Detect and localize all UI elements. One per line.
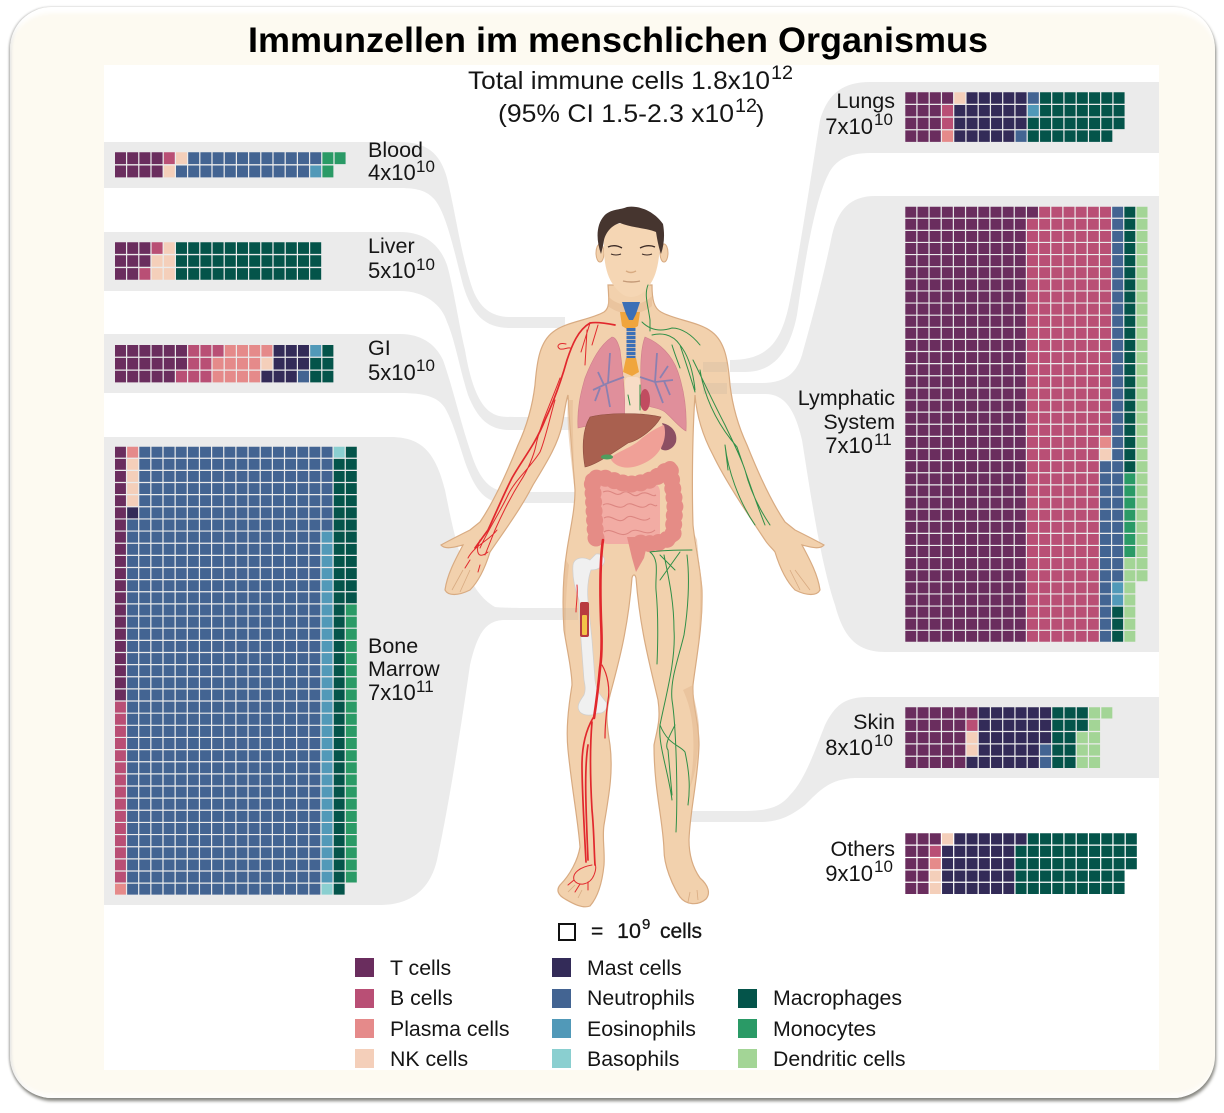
label: skin: 10 bbox=[874, 731, 893, 750]
label: bone marrow: 11 bbox=[416, 677, 434, 696]
label: GI bbox=[368, 336, 435, 385]
label: skin: Skin bbox=[853, 710, 895, 734]
thyroid and airway bbox=[620, 302, 640, 376]
waffle: skin bbox=[905, 713, 1114, 762]
legend column 3: Monocytes bbox=[773, 1017, 876, 1041]
label: lymphatic system bbox=[798, 386, 895, 458]
label: blood: 10 bbox=[416, 157, 435, 176]
legend column 1: B cells bbox=[390, 986, 453, 1010]
total immune cells heading: ) bbox=[756, 100, 764, 128]
legend bbox=[355, 956, 906, 1071]
title: Immunzellen im menschlichen Organismus bbox=[248, 21, 988, 60]
liver bbox=[583, 414, 661, 467]
label: liver bbox=[368, 234, 435, 283]
bronchi bbox=[593, 353, 673, 407]
face bbox=[604, 223, 660, 297]
spleen bbox=[661, 423, 676, 450]
large intestine bbox=[592, 468, 675, 544]
label: bone marrow: Bone bbox=[368, 634, 418, 658]
label: GI: GI bbox=[368, 336, 391, 360]
label: lymphatic system: 7x10 bbox=[825, 433, 873, 458]
label: blood bbox=[368, 138, 435, 185]
label: lungs: 10 bbox=[874, 110, 893, 129]
waffle: blood bbox=[115, 158, 347, 171]
body silhouette bbox=[441, 285, 824, 907]
arteries bbox=[465, 323, 615, 892]
total immune cells heading: 12 bbox=[771, 63, 793, 84]
label: lymphatic system: 11 bbox=[874, 430, 892, 449]
label: lymphatic system: Lymphatic bbox=[798, 386, 895, 410]
waffle: bone marrow bbox=[120, 447, 351, 896]
legend column 2 bbox=[552, 956, 696, 1071]
label: liver: 10 bbox=[416, 255, 435, 274]
connector ribbons bbox=[104, 82, 1159, 905]
gall bladder bbox=[601, 454, 613, 460]
legend column 1: T cells bbox=[390, 956, 451, 980]
waffle: lungs bbox=[905, 98, 1126, 136]
total immune cells heading: (95% CI 1.5-2.3 x10 bbox=[498, 100, 734, 128]
legend column 2: Eosinophils bbox=[587, 1017, 696, 1041]
label: others: 10 bbox=[874, 857, 893, 876]
esophagus and heart bbox=[625, 377, 640, 417]
label: others: Others bbox=[830, 837, 895, 861]
total immune cells heading: Total immune cells 1.8x10 bbox=[468, 67, 770, 95]
scale key: 9 bbox=[642, 916, 650, 933]
muscle shading bbox=[563, 296, 703, 790]
lungs bbox=[578, 337, 686, 431]
legend column 3 bbox=[738, 986, 906, 1071]
total immune cells heading: 12 bbox=[735, 96, 757, 117]
ears bbox=[596, 244, 668, 262]
scale key: = bbox=[591, 920, 603, 943]
waffle: liver bbox=[115, 248, 322, 274]
label: lungs: 7x10 bbox=[825, 114, 873, 139]
label: skin bbox=[825, 710, 895, 760]
legend column 2: Mast cells bbox=[587, 956, 682, 980]
white panel bbox=[104, 65, 1159, 1070]
total immune cells heading bbox=[468, 63, 793, 128]
label: skin: 8x10 bbox=[825, 735, 873, 760]
small intestine bbox=[598, 482, 660, 544]
legend column 3: Macrophages bbox=[773, 986, 902, 1010]
label: lymphatic system: System bbox=[823, 410, 895, 434]
label: GI: 10 bbox=[416, 356, 435, 375]
label: bone marrow: Marrow bbox=[368, 657, 440, 681]
lymphatic vessels bbox=[628, 285, 770, 832]
waffle: GI bbox=[115, 351, 335, 377]
waffle: lymphatic system bbox=[911, 207, 1142, 643]
label: bone marrow: 7x10 bbox=[368, 680, 416, 705]
legend column 1 bbox=[355, 956, 510, 1071]
legend column 3: Dendritic cells bbox=[773, 1047, 906, 1071]
label: liver: Liver bbox=[368, 234, 415, 258]
label: bone marrow bbox=[368, 634, 440, 705]
legend column 2: Neutrophils bbox=[587, 986, 695, 1010]
label: lungs bbox=[825, 89, 895, 139]
label: lungs: Lungs bbox=[836, 89, 895, 113]
label: others: 9x10 bbox=[825, 861, 873, 886]
hand and foot shading bbox=[452, 570, 810, 902]
femur bbox=[573, 554, 607, 715]
legend column 1: NK cells bbox=[390, 1047, 468, 1071]
label: others bbox=[825, 837, 895, 886]
ribbons showing through skin bbox=[564, 362, 727, 620]
legend column 1: Plasma cells bbox=[390, 1017, 510, 1041]
label: liver: 5x10 bbox=[368, 258, 416, 283]
legend column 2: Basophils bbox=[587, 1047, 679, 1071]
stomach bbox=[610, 425, 665, 468]
waffle: others bbox=[905, 839, 1138, 888]
facial features bbox=[608, 246, 655, 282]
hair bbox=[598, 207, 664, 254]
label: blood: 4x10 bbox=[368, 160, 416, 185]
scale key: cells bbox=[660, 920, 702, 943]
scale key: 10 bbox=[617, 919, 641, 943]
label: blood: Blood bbox=[368, 138, 423, 162]
label: GI: 5x10 bbox=[368, 360, 416, 385]
human body illustration bbox=[441, 207, 824, 907]
rectum bbox=[627, 537, 649, 572]
scale key bbox=[559, 916, 702, 943]
